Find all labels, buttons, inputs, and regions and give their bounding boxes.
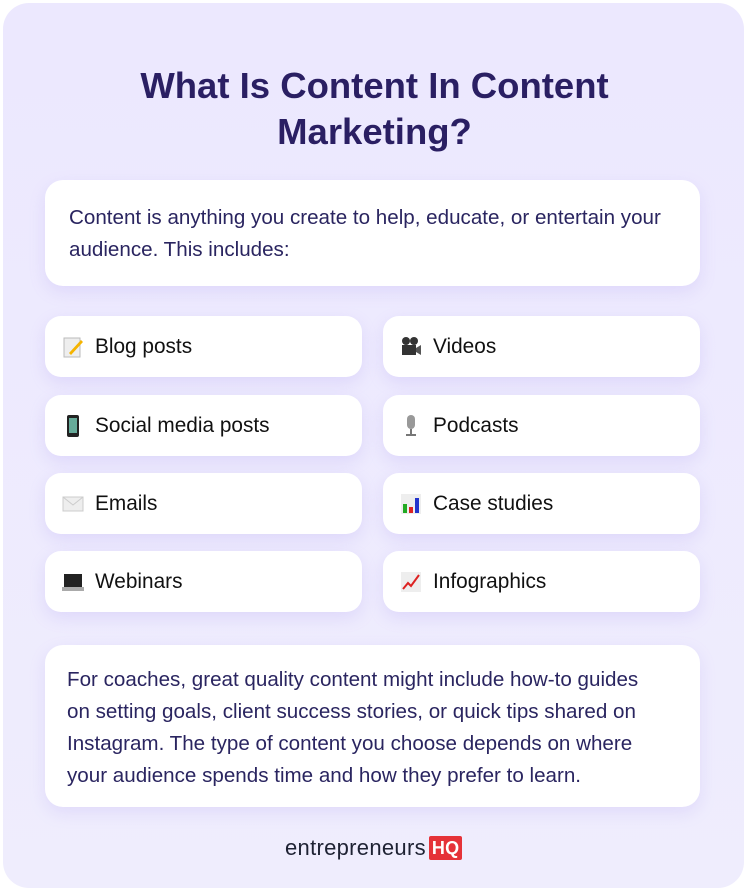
closing text box (45, 645, 700, 807)
closing text box: For coaches, great quality content might include how-to guides on setting goals, client success stories, or quick tips shared on Instagram. The type of content you choose depends on where your audience spends time and how they prefer to learn. (67, 668, 638, 787)
title: Marketing? (277, 111, 472, 152)
title (140, 65, 609, 152)
item: webinars (45, 551, 362, 612)
item: videos (383, 316, 700, 377)
item: blog posts (45, 316, 362, 377)
item: videos: Videos (433, 334, 496, 358)
item: infographics (383, 551, 700, 612)
item: emails: Emails (95, 492, 157, 514)
intro text box: Content is anything you create to help, educate, or entertain your audience. This includes: (69, 206, 661, 260)
item: emails (45, 473, 362, 534)
item: podcasts (383, 395, 700, 456)
logo: entrepreneurs (285, 835, 426, 860)
intro text box (45, 180, 700, 286)
title: What Is Content In Content (140, 65, 609, 106)
item: podcasts: Podcasts (433, 414, 519, 436)
item: case studies: Case studies (433, 492, 553, 514)
item: infographics: Infographics (433, 570, 546, 592)
logo: HQ (432, 838, 459, 858)
item: case studies (383, 473, 700, 534)
item: social media posts (45, 395, 362, 456)
item: social media posts: Social media posts (95, 414, 270, 436)
item: webinars: Webinars (95, 570, 182, 592)
item: blog posts: Blog posts (95, 334, 192, 358)
